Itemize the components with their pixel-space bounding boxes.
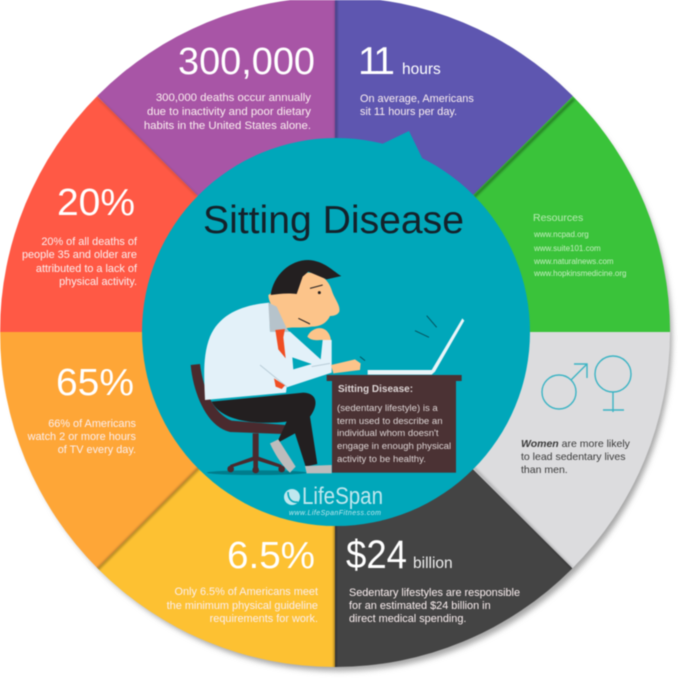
panel: central teal speech bubble (142, 131, 530, 526)
trousers (212, 393, 317, 467)
panel: grey wedge (473, 331, 671, 568)
stat: 20%: physical activity. (59, 276, 137, 288)
tie (274, 329, 286, 389)
stat: $24 billion: $24 (346, 533, 407, 577)
text: women continued: than men. (521, 464, 568, 476)
panel: yellow wedge (97, 468, 336, 668)
panel: dark wedge (334, 469, 573, 668)
stat: 65%: 66% of Americans (48, 418, 137, 430)
logo: LifeSpan: www.LifeSpanFitness.com (289, 510, 381, 517)
panel: green wedge (473, 96, 671, 333)
desk text: definition (337, 384, 451, 465)
stat: $24 billion: Sedentary lifestyles are responsible (349, 587, 520, 599)
hands (307, 328, 361, 373)
stat: 11 hours (358, 40, 474, 118)
stat: 65% (27, 362, 137, 456)
stat: $24 billion: billion (413, 555, 453, 572)
stat: 300,000 deaths: 300,000 deaths occur annually (156, 92, 311, 104)
stat: 6.5% (167, 535, 318, 625)
stat: 6.5%: Only 6.5% of Americans meet (175, 586, 318, 598)
icon: male and female symbols (542, 356, 631, 412)
illustration: man at desk (191, 260, 464, 475)
panel: blue wedge (334, 0, 574, 195)
wedge edge shadows (97, 0, 574, 670)
stat: 65%: of TV every day. (58, 444, 136, 456)
stat: 20% (22, 182, 138, 288)
title: Sitting Disease (203, 199, 464, 242)
resources list (533, 212, 626, 278)
floor shadow (207, 470, 307, 475)
text: women continued: to lead sedentary lives (521, 451, 625, 463)
stat: 11 hours: 11 (358, 40, 395, 83)
shoes (270, 439, 332, 473)
resources list: www.naturalnews.com (533, 257, 614, 266)
stat: $24 billion: for an estimated $24 billion in (349, 600, 491, 612)
stat: 6.5%: requirements for work. (210, 613, 318, 625)
motion lines (360, 316, 437, 361)
desk text: definition: term used to describe an (337, 416, 443, 427)
stat: 20%: 20% of all deaths of (41, 236, 138, 248)
neck and head (268, 273, 340, 330)
panel: red wedge (0, 96, 198, 333)
desk text: definition: (sedentary lifestyle) is a (337, 403, 438, 414)
resources list: www.suite101.com (533, 244, 601, 253)
stat: 20%: attributed to a lack of (36, 263, 138, 275)
stat: 20%: people 35 and older are (22, 249, 137, 261)
chair (191, 364, 285, 473)
hair (271, 260, 341, 295)
panel: purple wedge (96, 0, 336, 196)
text: women continued (521, 451, 625, 476)
desk text: definition: individual whom doesn't (337, 428, 439, 439)
stat: 11 hours: On average, Americans (360, 93, 474, 105)
resources list: www.ncpad.org (533, 230, 589, 239)
panel: orange wedge (0, 331, 198, 569)
laptop (368, 318, 464, 375)
sleeve crease (260, 363, 330, 387)
desk text: definition: engage in enough physical (337, 441, 451, 452)
shirt (204, 303, 332, 400)
stat: 20%: 20% (57, 182, 135, 224)
stat: 300,000 deaths (144, 41, 315, 132)
stat: 300,000 deaths: 300,000 (178, 41, 315, 83)
desk (327, 375, 462, 473)
collar (268, 303, 289, 332)
stat: 11 hours: hours (402, 61, 441, 78)
stat: 6.5%: 6.5% (227, 535, 315, 577)
logo: LifeSpan (284, 483, 383, 517)
desk text: definition: activity to be healthy. (337, 454, 426, 465)
stat: $24 billion: direct medical spending. (349, 613, 466, 625)
gap between torso and arm (292, 357, 312, 369)
stat: 11 hours: sit 11 hours per day. (360, 106, 457, 118)
stat: 65%: watch 2 or more hours (27, 431, 137, 443)
stat: 6.5%: the minimum physical guideline (167, 600, 318, 612)
stat: women more sedentary: Women are more likely (521, 438, 631, 450)
stat: 300,000 deaths: habits in the United States alone. (144, 120, 311, 132)
face details (298, 285, 323, 324)
stat: 65%: 65% (56, 362, 134, 404)
logo: LifeSpan: LifeSpan (302, 483, 383, 510)
desk text: definition: Sitting Disease: (338, 384, 413, 395)
stat: $24 billion (346, 533, 520, 625)
resources list: Resources (533, 212, 583, 224)
resources list: www.hopkinsmedicine.org (533, 269, 626, 278)
stat: 300,000 deaths: due to inactivity and poor dietary (147, 106, 311, 118)
